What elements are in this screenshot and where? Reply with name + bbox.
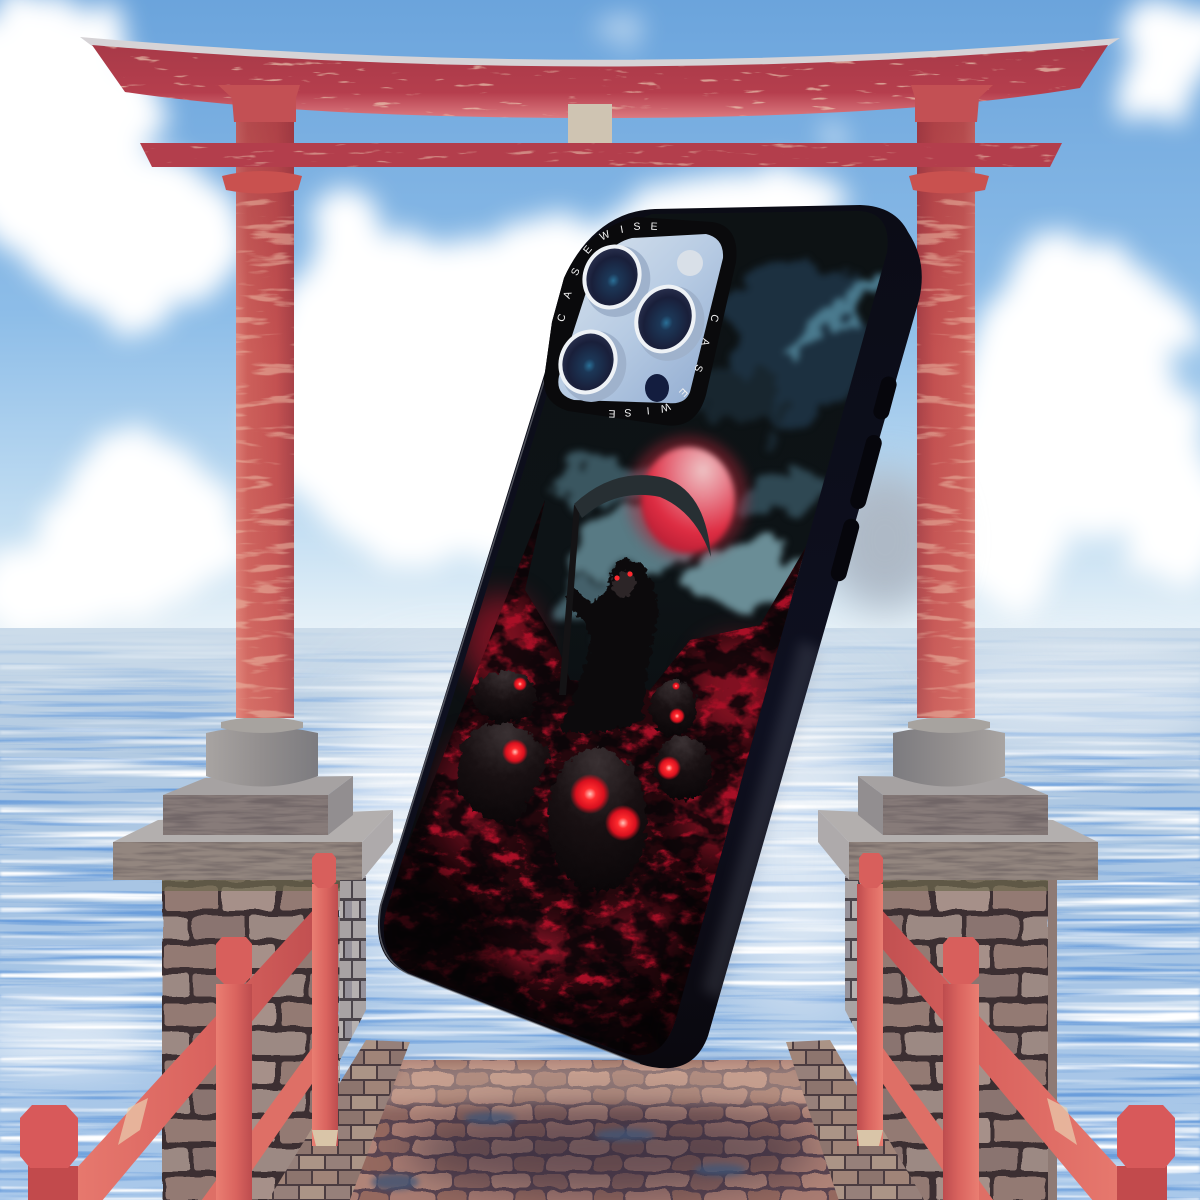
torii gate top beam [80, 37, 1120, 118]
grey cloud beside the phone [825, 470, 945, 610]
lettering right and bottom: S [624, 406, 632, 418]
lidar sensor [645, 374, 669, 402]
camera plate [558, 234, 723, 403]
lettering left and top: A [561, 290, 575, 300]
lettering left and top: W [598, 228, 612, 243]
lettering left and top [555, 221, 658, 323]
lettering left and top: C [555, 312, 569, 323]
red and black ground [384, 501, 806, 1052]
stone bridge floor [262, 1040, 930, 1200]
left railing [20, 853, 338, 1200]
reaper figure [560, 560, 658, 733]
lettering right and bottom: E [608, 407, 616, 419]
left curb [262, 1040, 410, 1200]
right brick column extension [1048, 880, 1057, 1200]
lettering right and bottom: I [646, 404, 650, 416]
lettering right and bottom [608, 313, 721, 419]
volume and power buttons [829, 375, 898, 583]
sky background [0, 0, 1200, 630]
storm clouds top right [700, 260, 885, 430]
lettering right and bottom: S [691, 363, 705, 374]
case artwork: reaper scene [384, 254, 882, 1055]
phone body silhouette [378, 205, 922, 1068]
sea [0, 628, 1200, 1200]
torii gate lower beam [140, 143, 1062, 167]
phone shadow on floor [405, 1108, 815, 1192]
left edge highlight [379, 378, 640, 1064]
lettering right and bottom: E [676, 385, 690, 399]
reaper eyes [614, 571, 633, 581]
camera surround with Casewise lettering [544, 217, 736, 426]
scythe [559, 475, 711, 695]
right curb [786, 1040, 930, 1200]
clouds [0, 0, 1200, 630]
right pillar and stone base [818, 85, 1098, 1200]
flash [677, 250, 703, 276]
teal cloud swirl [555, 460, 828, 635]
lettering left and top: I [619, 224, 624, 236]
glowing eyes [502, 677, 685, 841]
left pillar and stone base [113, 85, 393, 1200]
blood moon [628, 436, 748, 560]
beasts with glowing eyes [458, 671, 711, 892]
lettering left and top: E [581, 243, 595, 256]
lettering right and bottom: C [707, 313, 721, 324]
middle lens [622, 274, 716, 371]
lower lens [547, 320, 637, 412]
lettering right and bottom: W [658, 400, 672, 415]
lettering right and bottom: A [699, 337, 712, 347]
water puddles [371, 1112, 746, 1190]
lettering left and top: S [633, 221, 641, 233]
right railing [857, 853, 1175, 1200]
top lens [571, 235, 661, 327]
case side reflection [702, 640, 822, 1000]
phone in case [370, 200, 922, 1070]
lettering left and top: E [650, 221, 658, 233]
lettering left and top: S [569, 266, 583, 278]
torii gate centre strut [568, 104, 612, 143]
